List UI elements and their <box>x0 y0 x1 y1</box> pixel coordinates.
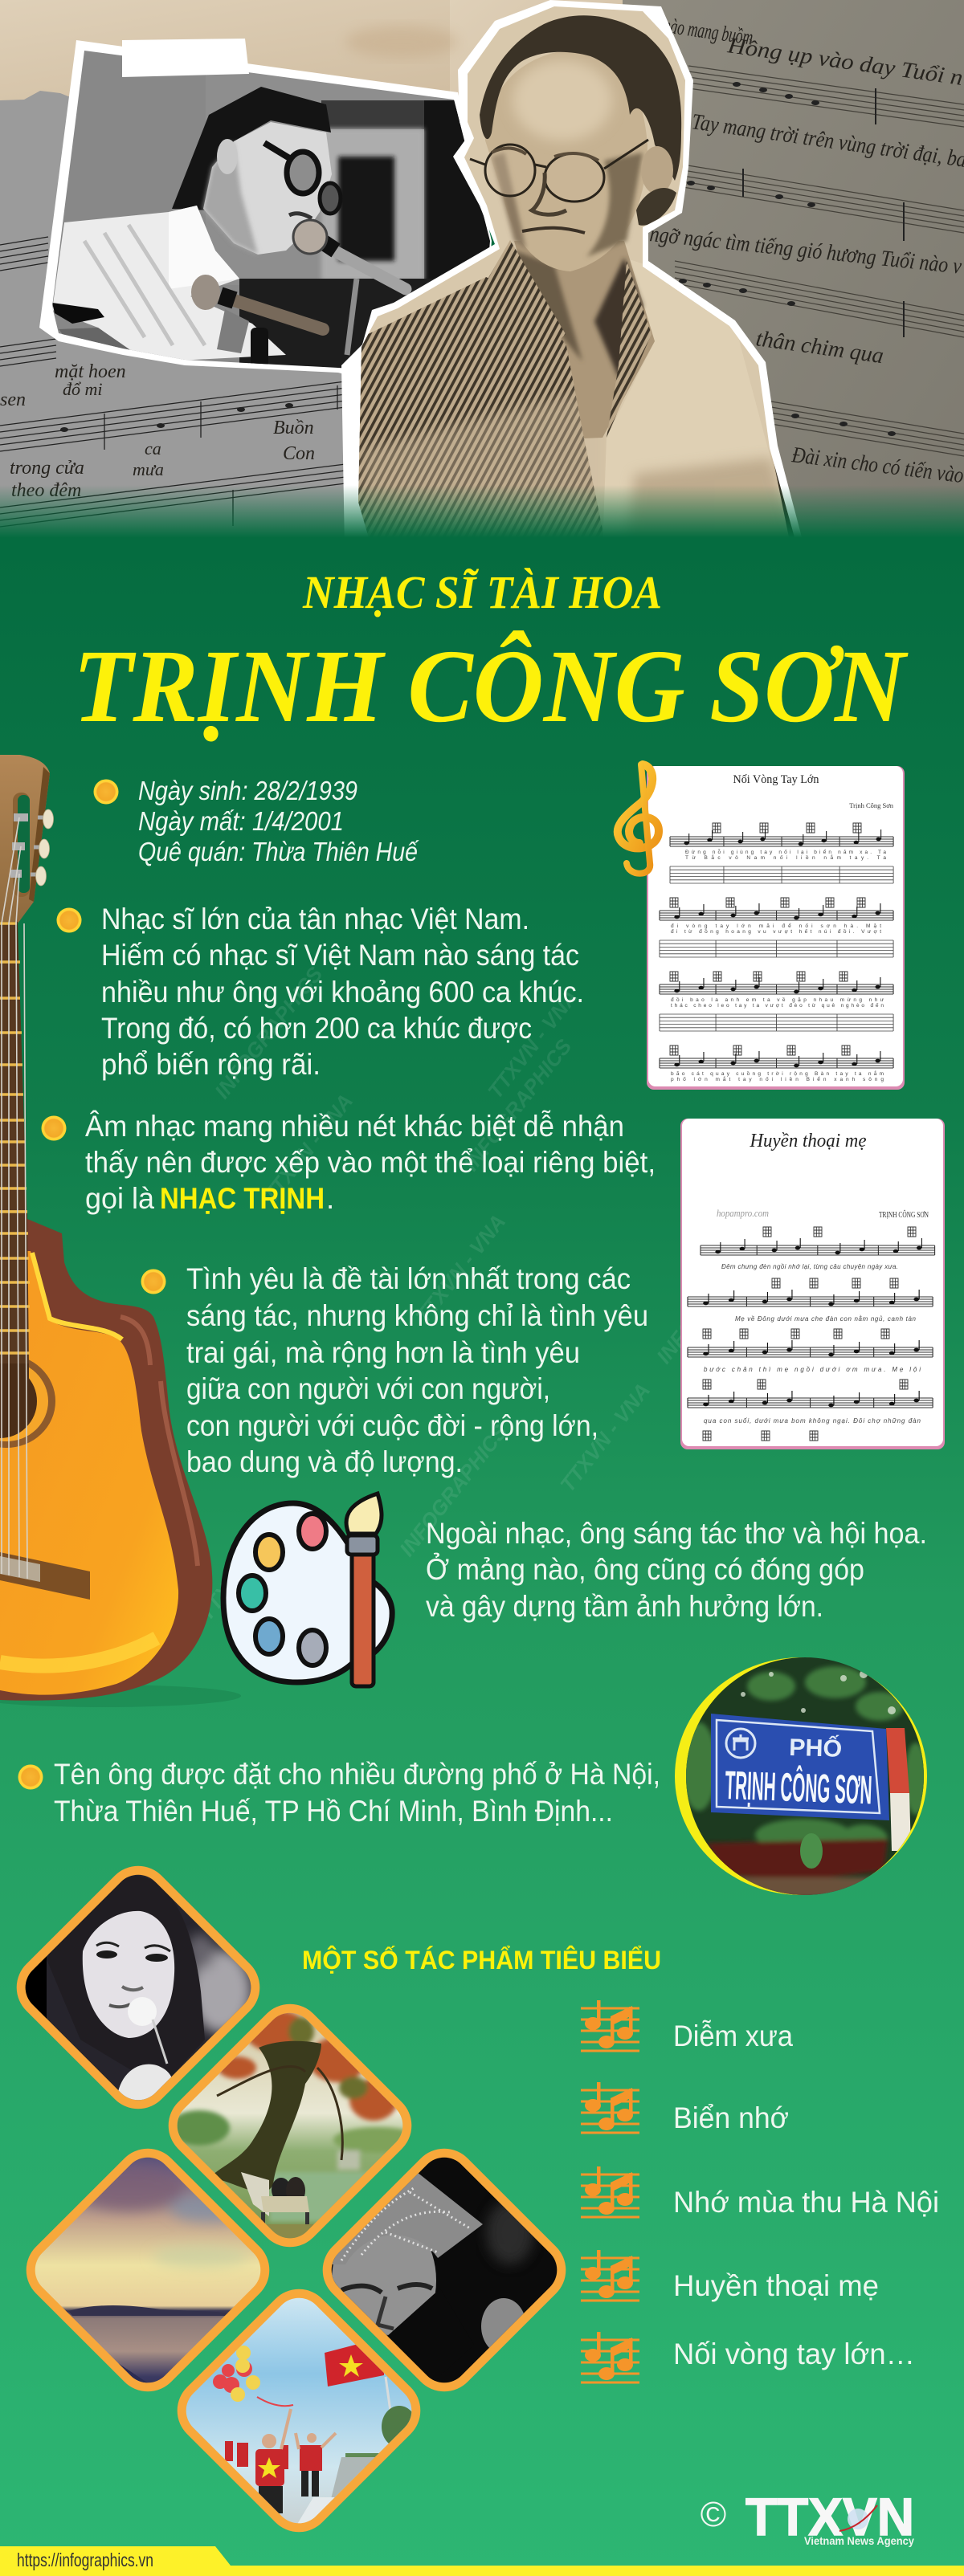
ear and neck hair <box>641 146 673 194</box>
tape <box>122 39 249 77</box>
handwritten score, right side <box>675 66 964 456</box>
watermark: INFOGRAPHICS <box>210 962 328 1103</box>
text: poetry and painting: Ở mảng nào, ông cũng có đóng góp <box>426 1552 864 1586</box>
handwritten score, left side: đổ mi <box>63 379 103 399</box>
paragraph: Trong đó, có hơn 200 ca khúc được <box>101 1012 532 1045</box>
handwritten score, left side: Buồn <box>273 418 314 438</box>
bullet: love as theme <box>141 1262 648 1478</box>
watermark: INFOGRAPHICS <box>394 1420 513 1561</box>
song: Nhớ mùa thu Hà Nội: Nhớ mùa thu Hà Nội <box>673 2186 939 2219</box>
icon: music notes <box>581 2082 639 2133</box>
photo diamond: woman with flower <box>15 1863 265 2112</box>
glasses <box>485 145 604 202</box>
paragraph: . <box>326 1182 334 1215</box>
handwritten score, left side <box>0 237 345 527</box>
tuning pegs <box>10 809 53 886</box>
song: Nhớ mùa thu Hà Nội <box>581 2166 939 2219</box>
song: Diễm xưa <box>581 2000 793 2052</box>
coin <box>141 1269 165 1294</box>
paragraph: bao dung và độ lượng. <box>186 1445 463 1478</box>
sound hole <box>0 1355 55 1448</box>
right portrait: cut-out of the composer <box>341 0 827 549</box>
watermark: TTXVN - VNA <box>194 1507 293 1625</box>
sheet music: Nối Vòng Tay Lớn: Từ Bắc vô Nam nối liền nắm tay. Ta <box>685 854 886 861</box>
photo diamond: old mother <box>320 2144 573 2397</box>
watermark: INFOGRAPHICS <box>652 1227 770 1368</box>
photo diamond: crowd with flag and balloons <box>174 2285 427 2538</box>
handwritten score, left side: mặt hoen <box>55 361 126 382</box>
handwritten score, left side: trong cửa <box>10 458 84 479</box>
text: poetry and painting: Ngoài nhạc, ông sáng tác thơ và hội họa. <box>426 1517 927 1550</box>
song: Biển nhớ: Biển nhớ <box>673 2101 789 2134</box>
microphones and stand <box>347 279 357 355</box>
paragraph <box>54 1758 660 1828</box>
paragraph: trai gái, mà rộng hơn là tình yêu <box>186 1336 580 1369</box>
birth and death details: Ngày sinh: 28/2/1939 <box>138 776 357 805</box>
sheet music: Nối Vòng Tay Lớn: Đừng nỗi giùng tay nối lại biển năm xa. Ta <box>685 848 886 855</box>
song: Huyền thoại mẹ <box>581 2250 879 2302</box>
paragraph: Thừa Thiên Huế, TP Hồ Chí Minh, Bình Định... <box>54 1795 613 1828</box>
birth and death details: Quê quán: Thừa Thiên Huế <box>138 837 419 866</box>
strings <box>2 817 27 1579</box>
brush <box>352 1550 374 1686</box>
sheet music: Huyền thoại mẹ: Huyền thoại mẹ <box>750 1131 867 1151</box>
body <box>0 1219 212 1701</box>
hair <box>480 15 681 181</box>
icon: music notes <box>581 2000 639 2051</box>
paragraph: Nhạc sĩ lớn của tân nhạc Việt Nam. <box>101 903 529 935</box>
photo diamond: flame tree by the lake <box>165 1999 422 2252</box>
watermark: TTXVN - VNA <box>411 1210 510 1328</box>
glasses <box>287 152 319 194</box>
guitar shadow <box>0 1685 241 1707</box>
sheet music: Nối Vòng Tay Lớn <box>647 766 905 1090</box>
song: Diễm xưa: Diễm xưa <box>673 2020 793 2052</box>
paragraph: Tình yêu là đề tài lớn nhất trong các <box>186 1262 631 1295</box>
photo diamond: sea at sunset <box>22 2144 276 2397</box>
sheet music: Nối Vòng Tay Lớn: bão cát quay cuồng trời rộng Bàn tay ta nắm <box>671 1070 884 1077</box>
agency wordmark: TTXVN <box>745 2487 914 2546</box>
head shape <box>485 50 647 271</box>
paragraph <box>101 903 584 1081</box>
paragraph: giữa con người với con người, <box>186 1372 550 1405</box>
birth and death details: Ngày mất: 1/4/2001 <box>138 806 344 836</box>
headstock <box>0 755 50 923</box>
bullet: streets named after him <box>18 1758 660 1828</box>
hero fade to green <box>0 485 964 551</box>
watermark <box>194 962 770 1625</box>
text: poetry and painting <box>426 1517 927 1623</box>
shirt <box>52 206 286 362</box>
paragraph: nhiều như ông với khoảng 600 ca khúc. <box>101 976 584 1009</box>
bullet: dates <box>93 776 419 866</box>
photo: street sign in circle <box>675 1657 927 1897</box>
paragraph: con người với cuộc đời - rộng lớn, <box>186 1409 598 1442</box>
sheet music: Huyền thoại mẹ <box>680 1119 945 1449</box>
paragraph: thấy nên được xếp vào một thể loại riêng biệt, <box>85 1146 656 1179</box>
footer band with website <box>0 2546 964 2576</box>
hero: collage of photos and handwritten score <box>0 0 964 549</box>
hair <box>172 87 331 210</box>
watermark: TTXVN - VNA <box>555 1379 655 1497</box>
title line 1: NHẠC SĨ TÀI HOA <box>302 566 662 618</box>
bullet: major composer <box>56 903 584 1081</box>
handwritten score, left side: sen <box>0 389 26 410</box>
collars <box>488 240 566 339</box>
sheet music: Nối Vòng Tay Lớn: thác cheo leo tay ta vượt đèo từ quê nghèo đến <box>671 1001 884 1009</box>
blue sign <box>711 1714 889 1820</box>
shirt right, plain <box>604 267 739 507</box>
paragraph <box>85 1110 656 1215</box>
sheet music: Nối Vòng Tay Lớn: đi từ đồng hoang vu vượt hết núi đồi. Vượt <box>671 927 881 935</box>
bridge <box>0 1552 90 1600</box>
text: poetry and painting: và gây dựng tầm ảnh hưởng lớn. <box>426 1590 823 1623</box>
sheet music: Huyền thoại mẹ: TRỊNH CÔNG SƠN <box>879 1210 929 1220</box>
copyright mark: © <box>701 2495 726 2534</box>
handwritten score, left side: theo đêm <box>11 480 81 501</box>
paragraph: Hiếm có nhạc sĩ Việt Nam nào sáng tác <box>101 939 579 972</box>
left photo: singing at microphone <box>39 39 492 373</box>
paragraph <box>186 1262 648 1478</box>
coin <box>18 1765 43 1789</box>
photo: street sign in circle: PHỐ <box>789 1734 843 1763</box>
hero: collage of photos and handwritten score: nào mang buồm <box>662 13 754 50</box>
guitar <box>0 755 241 1707</box>
sheet music: Huyền thoại mẹ: qua con suối, dưới mưa bom không ngại. Đôi chợ những đàn <box>704 1417 921 1425</box>
watermark: TTXVN - VNA <box>258 1090 357 1208</box>
face shading <box>586 153 643 257</box>
TTXVN logo <box>701 2487 914 2547</box>
sheet music: Nối Vòng Tay Lớn: đi vòng tay lớn mãi để nối sơn hà. Mặt <box>671 922 881 929</box>
sheet music: Nối Vòng Tay Lớn: Trịnh Công Sơn <box>849 801 894 809</box>
sheet music: Nối Vòng Tay Lớn: Nối Vòng Tay Lớn <box>733 773 819 786</box>
coin <box>42 1116 66 1140</box>
sheet music: Huyền thoại mẹ: Mẹ về Đông dưới mưa che đàn con nằm ngủ, canh tàn <box>735 1315 917 1323</box>
paragraph: Tên ông được đặt cho nhiều đường phố ở Hà Nội, <box>54 1758 660 1791</box>
treble clef <box>618 764 659 874</box>
agency name: Vietnam News Agency <box>804 2534 914 2547</box>
watermark: TTXVN - VNA <box>483 985 582 1103</box>
paragraph: phổ biến rộng rãi. <box>101 1048 321 1081</box>
song: Biển nhớ <box>581 2082 789 2134</box>
sheet music: Huyền thoại mẹ: bước chân thì mẹ ngồi dưới ơm mưa. Mẹ lội <box>704 1366 921 1373</box>
hero: collage of photos and handwritten score: Hồng ụp vào day Tuổi n <box>725 33 964 91</box>
sheet music: Nối Vòng Tay Lớn: phố lớn mắt tay nối liền Biển xanh sông <box>671 1075 884 1082</box>
paragraph: sáng tác, nhưng không chỉ là tình yêu <box>186 1299 648 1332</box>
icon: music notes <box>581 2332 639 2382</box>
neck <box>0 922 27 1229</box>
heading: representative works: MỘT SỐ TÁC PHẨM TIÊU BIỂU <box>302 1946 661 1975</box>
song: Huyền thoại mẹ: Huyền thoại mẹ <box>673 2269 879 2302</box>
face <box>203 122 332 255</box>
sheet music: Nối Vòng Tay Lớn: đồi bao la anh em ta về gặp nhau mừng như <box>671 996 884 1003</box>
sheet music: Huyền thoại mẹ: hopampro.com <box>717 1207 769 1219</box>
handwritten score, left side: ca <box>145 438 161 459</box>
icon: music notes <box>581 2166 639 2217</box>
hero: collage of photos and handwritten score: thân chim qua <box>754 326 885 369</box>
title <box>73 566 909 744</box>
paragraph: Âm nhạc mang nhiều nét khác biệt dễ nhận <box>85 1110 624 1143</box>
neck and open chest <box>514 241 655 438</box>
nose and mouth <box>532 173 566 214</box>
forehead highlight <box>513 60 612 141</box>
song: Nối vòng tay lớn: Nối vòng tay lớn… <box>673 2338 915 2370</box>
coin <box>93 779 119 805</box>
watermark: INFOGRAPHICS <box>459 1034 577 1176</box>
paragraph: NHẠC TRỊNH <box>160 1182 325 1215</box>
title line 2: TRỊNH CÔNG SƠN <box>73 629 909 744</box>
song: Nối vòng tay lớn <box>581 2332 915 2382</box>
birth and death details <box>138 776 419 866</box>
coin <box>56 907 82 933</box>
bullet: nhạc Trịnh <box>42 1110 656 1215</box>
footer band with website: https://infographics.vn <box>17 2550 153 2570</box>
handwritten score, left side: Con <box>283 443 315 464</box>
handwritten score, left side: mưa <box>133 459 164 479</box>
fretboard over body <box>0 1213 29 1365</box>
sheet music: Huyền thoại mẹ: Đêm chưng đèn ngồi nhớ lại, từng câu chuyện ngày xưa. <box>721 1263 898 1270</box>
shirt left, striped <box>353 277 607 549</box>
icon: paint palette and brush <box>223 1494 392 1686</box>
paragraph: gọi là <box>85 1182 154 1215</box>
icon: music notes <box>581 2250 639 2301</box>
